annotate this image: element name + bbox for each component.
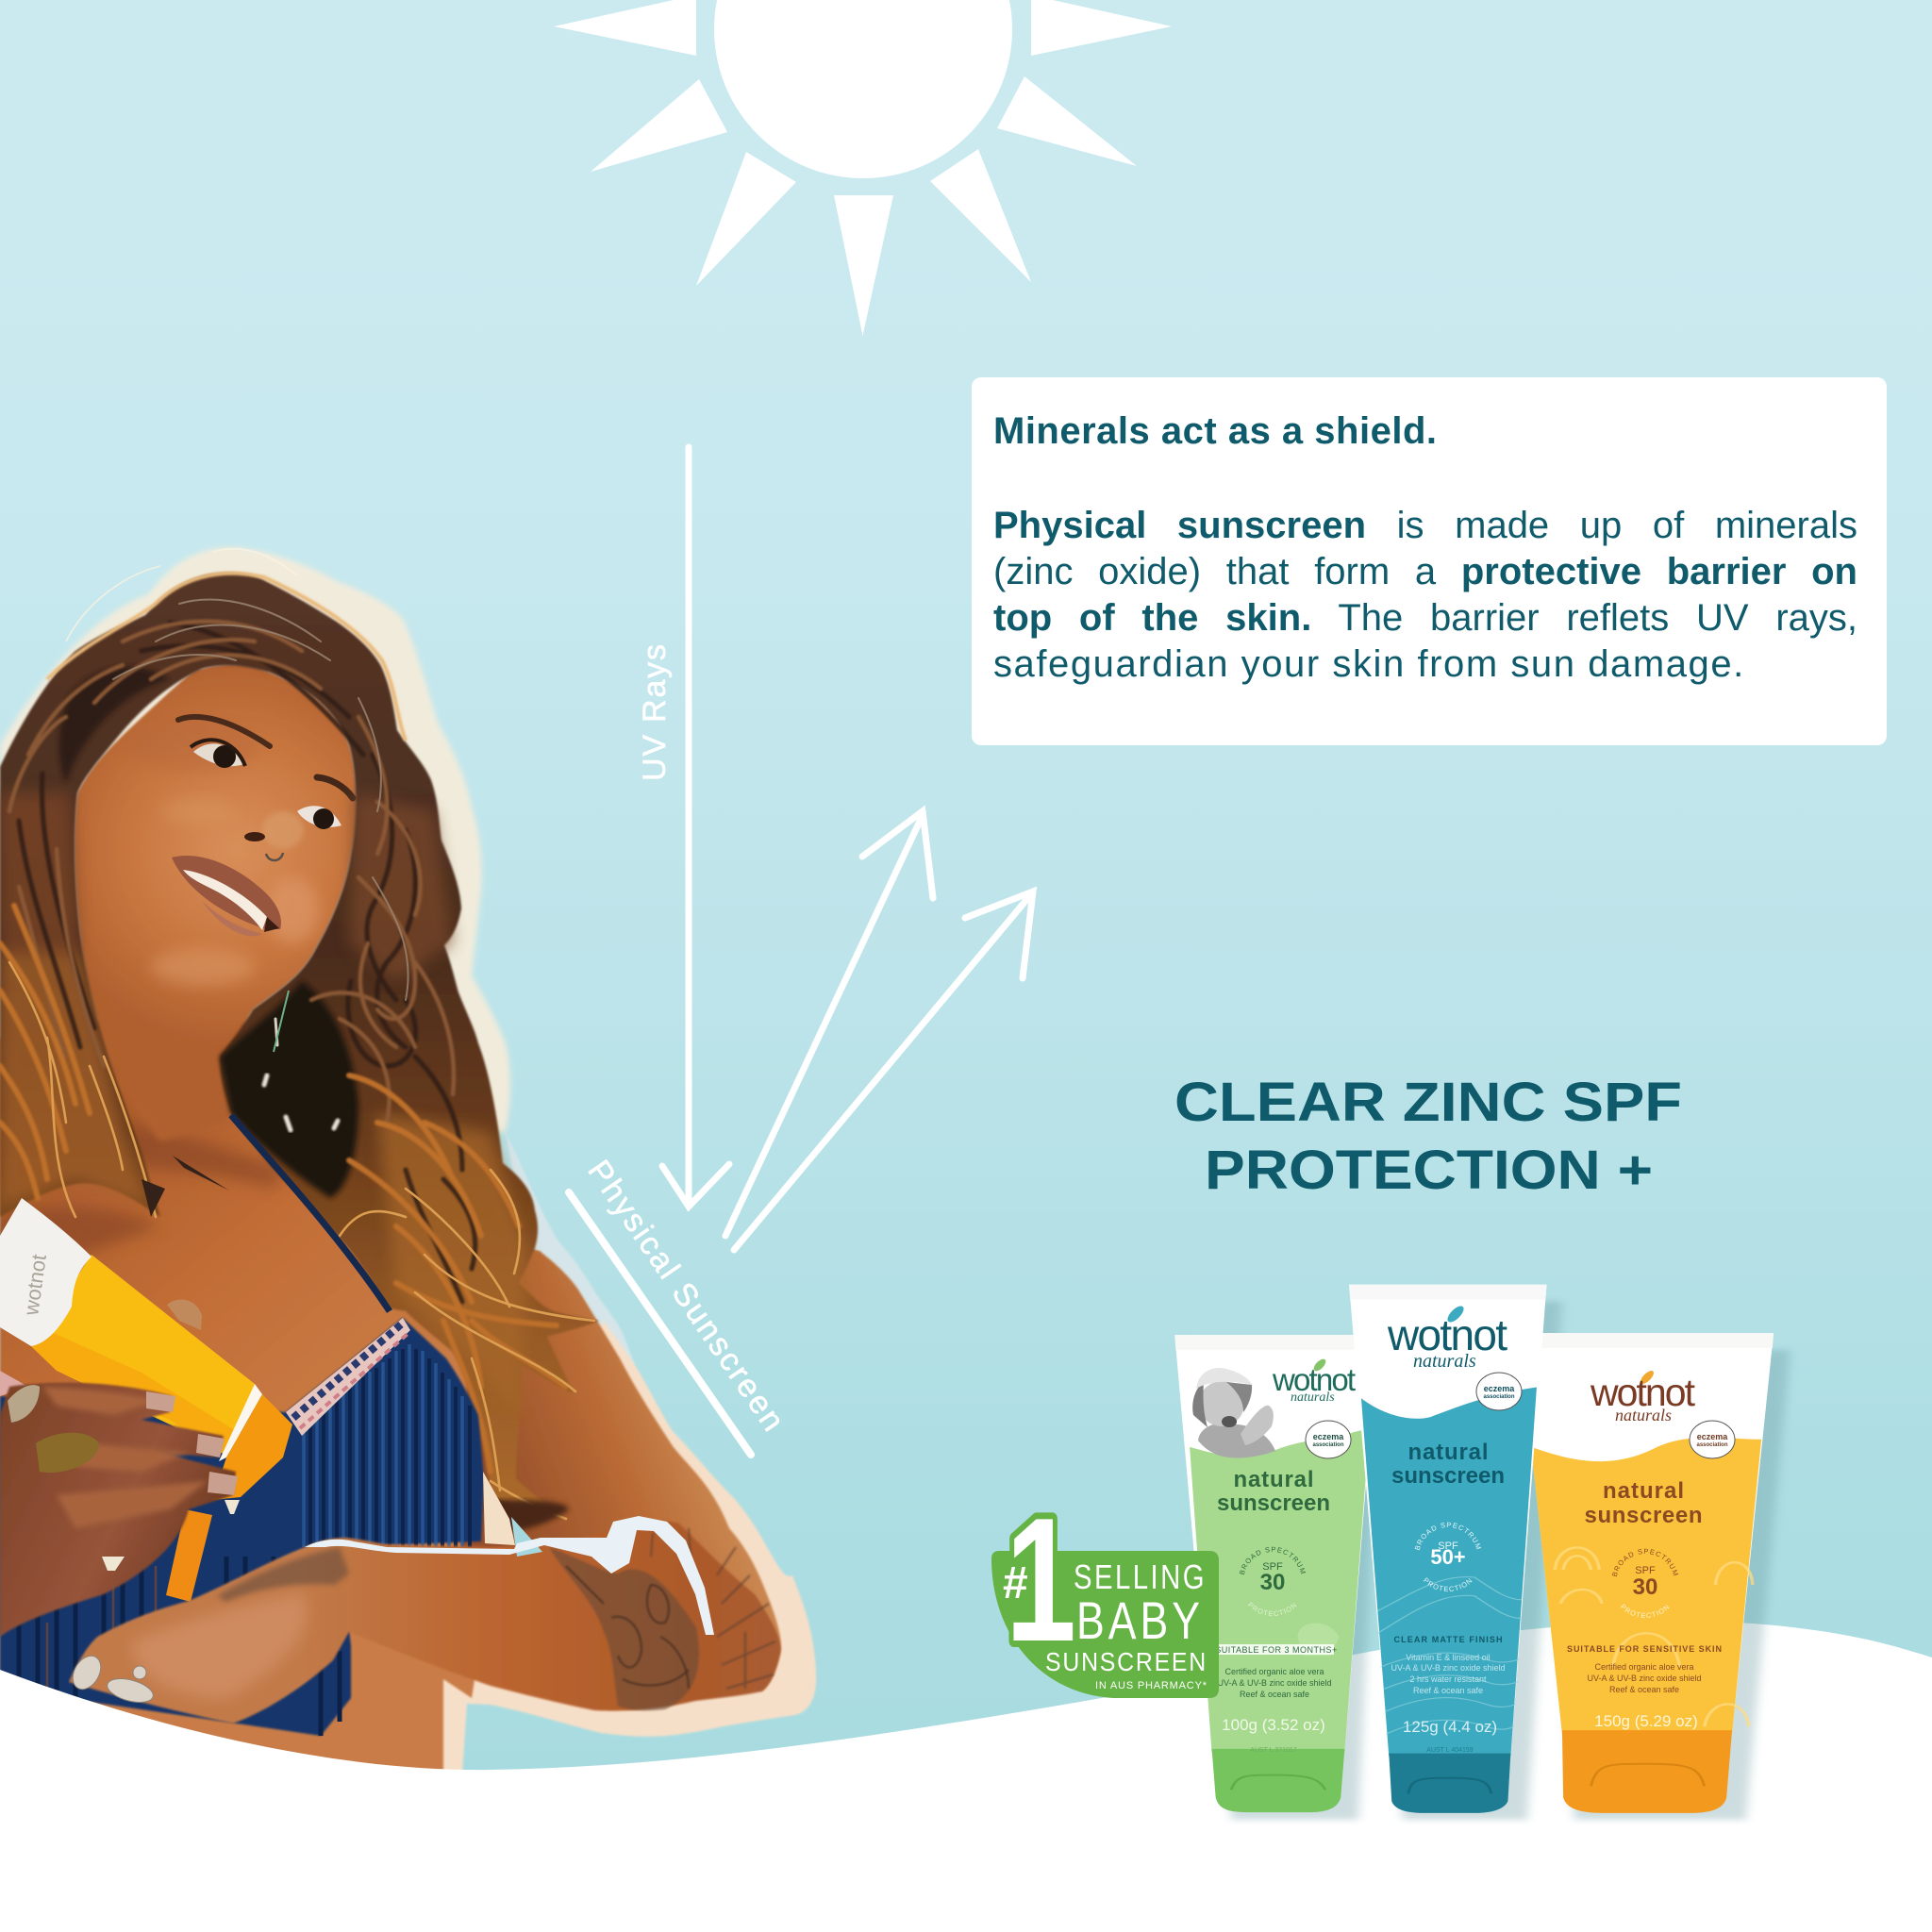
arrow: reflected UV ray two — [734, 891, 1033, 1250]
bikini fringe strands — [19, 1344, 470, 1736]
back of hand highlights — [132, 1594, 307, 1698]
cream halo behind hair — [0, 547, 510, 1132]
hand holding the tube — [0, 1299, 240, 1637]
torso and shoulder skin — [0, 1000, 541, 1774]
arm tattoos — [549, 1528, 775, 1710]
yellow tube label text: PROTECTION — [1621, 1604, 1670, 1619]
yellow tube label text: SPF — [1635, 1565, 1656, 1576]
badge: #1 selling baby sunscreen: SUNSCREEN — [1045, 1647, 1208, 1676]
tube brand logos: naturals — [1413, 1351, 1476, 1372]
hair strands: dark — [19, 623, 475, 1302]
green tube label text — [1215, 1467, 1338, 1754]
green tube label text: Reef & ocean safe — [1240, 1690, 1309, 1699]
yellow tube label text: Reef & ocean safe — [1609, 1685, 1679, 1694]
blue tube label text: Vitamin E & linseed oil — [1406, 1653, 1491, 1662]
tube shapes — [1174, 1285, 1790, 1820]
yellow tube label text: UV-A & UV-B zinc oxide shield — [1587, 1674, 1702, 1683]
yellow tube — [1519, 1333, 1774, 1813]
held yellow sunscreen tube — [0, 1198, 292, 1602]
face — [75, 664, 357, 1094]
heading: CLEAR ZINC SPF — [1174, 1072, 1682, 1133]
tube leaves — [1312, 1304, 1656, 1386]
teal gap under arm — [511, 1517, 542, 1557]
body line one: Physical sunscreen is made up of minerals — [993, 505, 1857, 546]
heading: PROTECTION + — [1205, 1140, 1653, 1201]
body line three: top of the skin. The barrier reflets UV rays, — [993, 597, 1857, 639]
green tube label text: BROAD SPECTRUM — [1240, 1547, 1306, 1575]
navy fringe bikini top — [0, 1318, 484, 1736]
blue tube label text: BROAD SPECTRUM — [1415, 1523, 1481, 1551]
blue tube label text: 125g (4.4 oz) — [1403, 1718, 1497, 1736]
yellow tube label text: 30 — [1633, 1574, 1657, 1600]
green tube label text: AUST L 371017 — [1250, 1747, 1297, 1754]
eczema association badges: association — [1696, 1442, 1728, 1448]
hair strands: mid brown — [9, 622, 454, 1123]
green tube label text: 100g (3.52 oz) — [1222, 1716, 1325, 1734]
facial features — [127, 717, 353, 986]
hair strands: ash highlights on crown — [113, 600, 408, 1000]
pale glow on the upper arm — [506, 1132, 635, 1368]
tube brand logos: naturals — [1291, 1391, 1335, 1405]
label: Physical Sunscreen: Physical Sunscreen — [580, 1154, 791, 1438]
collarbone shading — [0, 1113, 283, 1264]
applied sunscreen streak — [305, 1516, 714, 1635]
panel heading: Minerals act as a shield. — [993, 410, 1438, 452]
blue tube label text: 2 hrs water resistant — [1409, 1674, 1487, 1684]
held yellow sunscreen tube: wotnot — [19, 1253, 51, 1318]
tube brand logos — [1272, 1310, 1696, 1424]
tube brand logos: wotnot — [1272, 1362, 1356, 1397]
dark shadow area under the chin — [59, 667, 358, 1198]
yellow tube label text: BROAD SPECTRUM — [1611, 1549, 1678, 1577]
eczema association badges: eczema — [1697, 1432, 1728, 1441]
eczema association badges: association — [1483, 1394, 1515, 1400]
eczema association badges: eczema — [1313, 1432, 1344, 1441]
eczema association badges: association — [1312, 1442, 1344, 1448]
blue tube label text: sunscreen — [1391, 1463, 1505, 1489]
product group: three sunscreen tubes — [1174, 1285, 1792, 1823]
illustration: white sun with rays — [554, 0, 1172, 336]
photo: woman applying sunscreen — [0, 547, 816, 1774]
text panel: minerals act as a shield — [972, 377, 1887, 745]
hair strands: golden tips — [9, 962, 594, 1519]
feather-like hair tips on chest — [142, 1156, 229, 1217]
neck — [104, 962, 253, 1141]
blue tube label text: CLEAR MATTE FINISH — [1394, 1635, 1502, 1644]
badge: #1 selling baby sunscreen: IN AUS PHARMACY* — [1095, 1680, 1208, 1691]
green tube label text: SPF — [1262, 1561, 1283, 1573]
tube brand logos: wotnot — [1387, 1310, 1507, 1359]
badge: #1 selling baby sunscreen: BABY — [1076, 1591, 1204, 1650]
eczema association badges — [1306, 1373, 1735, 1458]
green tube label text: SUITABLE FOR 3 MONTHS+ — [1215, 1645, 1338, 1655]
yellow tube label text: natural — [1603, 1478, 1684, 1504]
yellow tube label text: sunscreen — [1585, 1503, 1702, 1528]
blue tube — [1349, 1285, 1547, 1813]
body line four: safeguardian your skin from sun damage. — [993, 643, 1745, 685]
yellow tube label text: 150g (5.29 oz) — [1594, 1712, 1698, 1730]
green tube label text: natural — [1234, 1467, 1313, 1492]
green tube label text: PROTECTION — [1247, 1602, 1296, 1617]
green tube label text: UV-A & UV-B zinc oxide shield — [1217, 1678, 1332, 1688]
tube brand logos: naturals — [1615, 1406, 1672, 1424]
yellow tube label text — [1567, 1478, 1722, 1730]
green tube label text: Certified organic aloe vera — [1224, 1667, 1324, 1676]
hand tattoo — [217, 1547, 349, 1602]
rings on lower hand — [67, 1651, 156, 1707]
badge: #1 selling baby sunscreen: SELLING — [1074, 1557, 1207, 1596]
long curly hair mass — [0, 573, 599, 1519]
cream gap by bikini — [483, 1472, 515, 1545]
warm colour on hair lengths — [0, 792, 528, 1415]
physical sunscreen barrier line — [569, 1192, 751, 1455]
green tube label text: sunscreen — [1217, 1491, 1330, 1516]
golden rim light on hair top — [47, 574, 406, 741]
badge: #1 selling baby sunscreen — [991, 1481, 1219, 1698]
blue tube label text: Reef & ocean safe — [1413, 1686, 1483, 1695]
yellow tube label text: Certified organic aloe vera — [1594, 1662, 1694, 1672]
heading — [1174, 1072, 1682, 1201]
patterned trim — [0, 1318, 410, 1477]
upper arm skin — [462, 1226, 781, 1691]
dark hair shadow above arm — [491, 1500, 569, 1533]
body line two: (zinc oxide) that form a protective barrier on — [993, 551, 1857, 592]
blue tube label text — [1391, 1440, 1506, 1754]
halter strap — [231, 1115, 390, 1311]
blue tube label text: natural — [1407, 1440, 1489, 1465]
green tube label text: 30 — [1260, 1570, 1285, 1595]
bottom white wave — [0, 1622, 1932, 1932]
label: UV Rays: UV Rays — [637, 644, 673, 781]
yellow tube label text: SUITABLE FOR SENSITIVE SKIN — [1567, 1644, 1722, 1654]
arrow: reflected UV ray one — [725, 811, 933, 1236]
peach halo around arm — [439, 1321, 816, 1774]
badge: #1 selling baby sunscreen: 1 — [1006, 1481, 1076, 1678]
blue tube label text: SPF — [1438, 1541, 1458, 1552]
blue tube label text: 50+ — [1430, 1545, 1466, 1569]
eczema association badges: eczema — [1484, 1384, 1515, 1393]
baby photo on green tube — [1192, 1368, 1275, 1457]
badge: #1 selling baby sunscreen: # — [1003, 1558, 1028, 1608]
blue tube label text: AUST L 404159 — [1426, 1747, 1474, 1754]
blue tube label text: UV-A & UV-B zinc oxide shield — [1391, 1663, 1506, 1673]
green tube — [1174, 1335, 1378, 1812]
arrow: incoming UV ray — [662, 447, 729, 1207]
hair strands: orange lengths — [0, 906, 566, 1472]
flyaway wisps — [66, 549, 297, 641]
lower hand, wrist and forearm — [69, 1521, 781, 1724]
blue tube label text: PROTECTION — [1423, 1577, 1472, 1592]
tube brand logos: wotnot — [1590, 1371, 1696, 1414]
